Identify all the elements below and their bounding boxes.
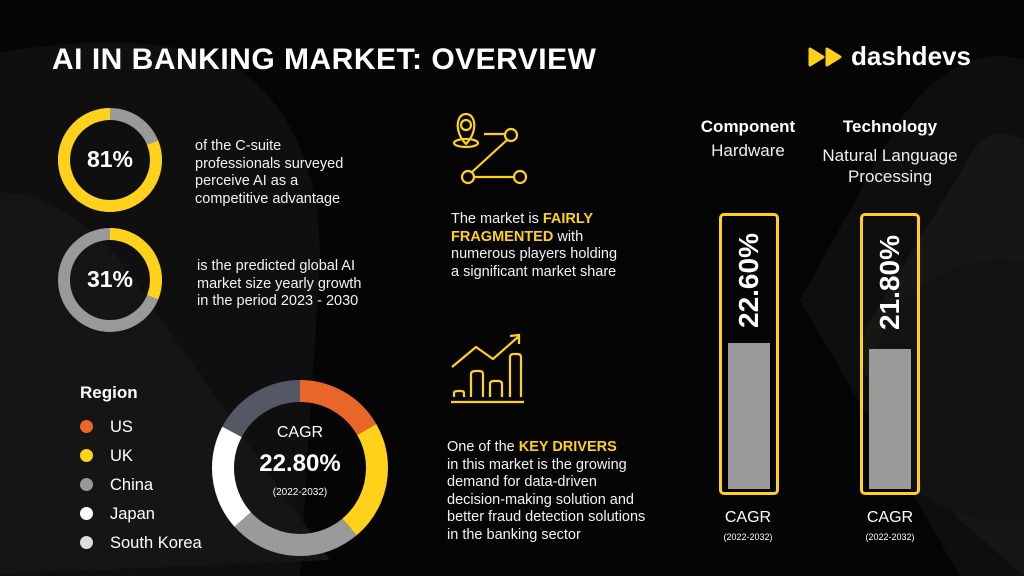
text key drivers: [447, 439, 645, 542]
text 31: is the predicted global AI: [197, 258, 355, 274]
region legend: UK: [110, 447, 133, 465]
text 31: [197, 258, 361, 309]
component column: Component: [701, 117, 795, 136]
text 81: competitive advantage: [195, 190, 340, 206]
title: AI IN BANKING MARKET: OVERVIEW: [52, 43, 596, 76]
bar 22.60: [719, 213, 779, 495]
region donut: (2022-2032): [273, 487, 327, 498]
region legend: [80, 383, 202, 552]
region donut: CAGR: [277, 424, 323, 441]
region legend: Japan: [110, 505, 155, 523]
text key drivers: One of the KEY DRIVERS: [447, 439, 617, 455]
region legend: US: [110, 418, 133, 436]
region legend: Region: [80, 383, 138, 402]
component column: Hardware: [711, 141, 785, 160]
text key drivers: in the banking sector: [447, 526, 581, 542]
donut 81%: [58, 108, 162, 212]
logo: dashdevs: [851, 41, 971, 71]
text 81: perceive AI as a: [195, 173, 298, 189]
bar 21.80: 21.80%: [874, 235, 905, 330]
text key drivers: demand for data-driven: [447, 474, 597, 490]
text 81: [195, 138, 343, 206]
text fragmented: a significant market share: [451, 264, 616, 280]
technology column: (2022-2032): [865, 532, 915, 542]
icon: growth chart: [451, 334, 524, 404]
text key drivers: better fraud detection solutions: [447, 509, 645, 525]
donut 81%: 81%: [87, 146, 133, 172]
text 81: of the C-suite: [195, 138, 281, 154]
icon: fragmented map: [452, 112, 528, 184]
technology column: Technology: [843, 117, 937, 136]
text 31: market size yearly growth: [197, 276, 361, 292]
technology column: [822, 117, 958, 542]
text fragmented: The market is FAIRLY: [451, 211, 593, 227]
technology column: Processing: [848, 167, 932, 186]
region donut: [212, 380, 388, 556]
technology column: Natural Language: [822, 146, 958, 165]
region legend: China: [110, 476, 153, 494]
text 31: in the period 2023 - 2030: [197, 293, 358, 309]
donut 31%: 31%: [87, 266, 133, 292]
technology column: CAGR: [867, 509, 913, 526]
text fragmented: [451, 211, 617, 280]
text 81: professionals surveyed: [195, 156, 343, 172]
text fragmented: FRAGMENTED with: [451, 228, 583, 244]
text fragmented: numerous players holding: [451, 246, 617, 262]
bar 21.80: [860, 213, 920, 495]
region legend: South Korea: [110, 534, 202, 552]
component column: (2022-2032): [723, 532, 773, 542]
donut 31%: [58, 228, 162, 332]
bar 22.60: 22.60%: [733, 233, 764, 328]
region donut: 22.80%: [259, 450, 341, 477]
text key drivers: decision-making solution and: [447, 492, 634, 508]
text key drivers: in this market is the growing: [447, 456, 627, 472]
component column: [701, 117, 795, 542]
component column: CAGR: [725, 509, 771, 526]
